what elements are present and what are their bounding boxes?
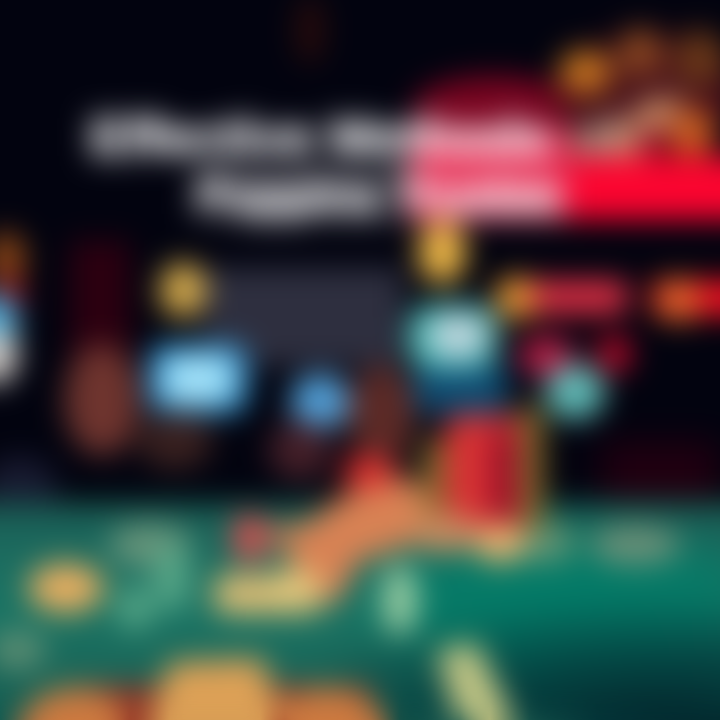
chip stack: tall red — [422, 405, 544, 530]
foreground chips — [25, 658, 380, 720]
title: Effective Methods — [90, 109, 550, 167]
blurred patrons — [0, 344, 416, 524]
gold chips on table — [28, 563, 322, 614]
green felt table — [0, 502, 720, 720]
table markings — [0, 523, 681, 720]
title: of — [572, 109, 622, 167]
bottom edge colour underlay — [0, 680, 720, 720]
hanging gold lamps — [159, 220, 466, 318]
title — [90, 109, 622, 225]
red sign lights — [495, 276, 720, 376]
spilled orange chips — [232, 454, 526, 604]
dark band behind title — [210, 165, 410, 225]
panel: top right red and gold lights — [413, 28, 720, 158]
red banner behind title — [410, 128, 720, 220]
blue and teal screens — [148, 304, 605, 430]
title: Poppins Trustee — [195, 167, 560, 225]
left edge screen lights — [0, 232, 26, 384]
background glows — [70, 0, 720, 510]
